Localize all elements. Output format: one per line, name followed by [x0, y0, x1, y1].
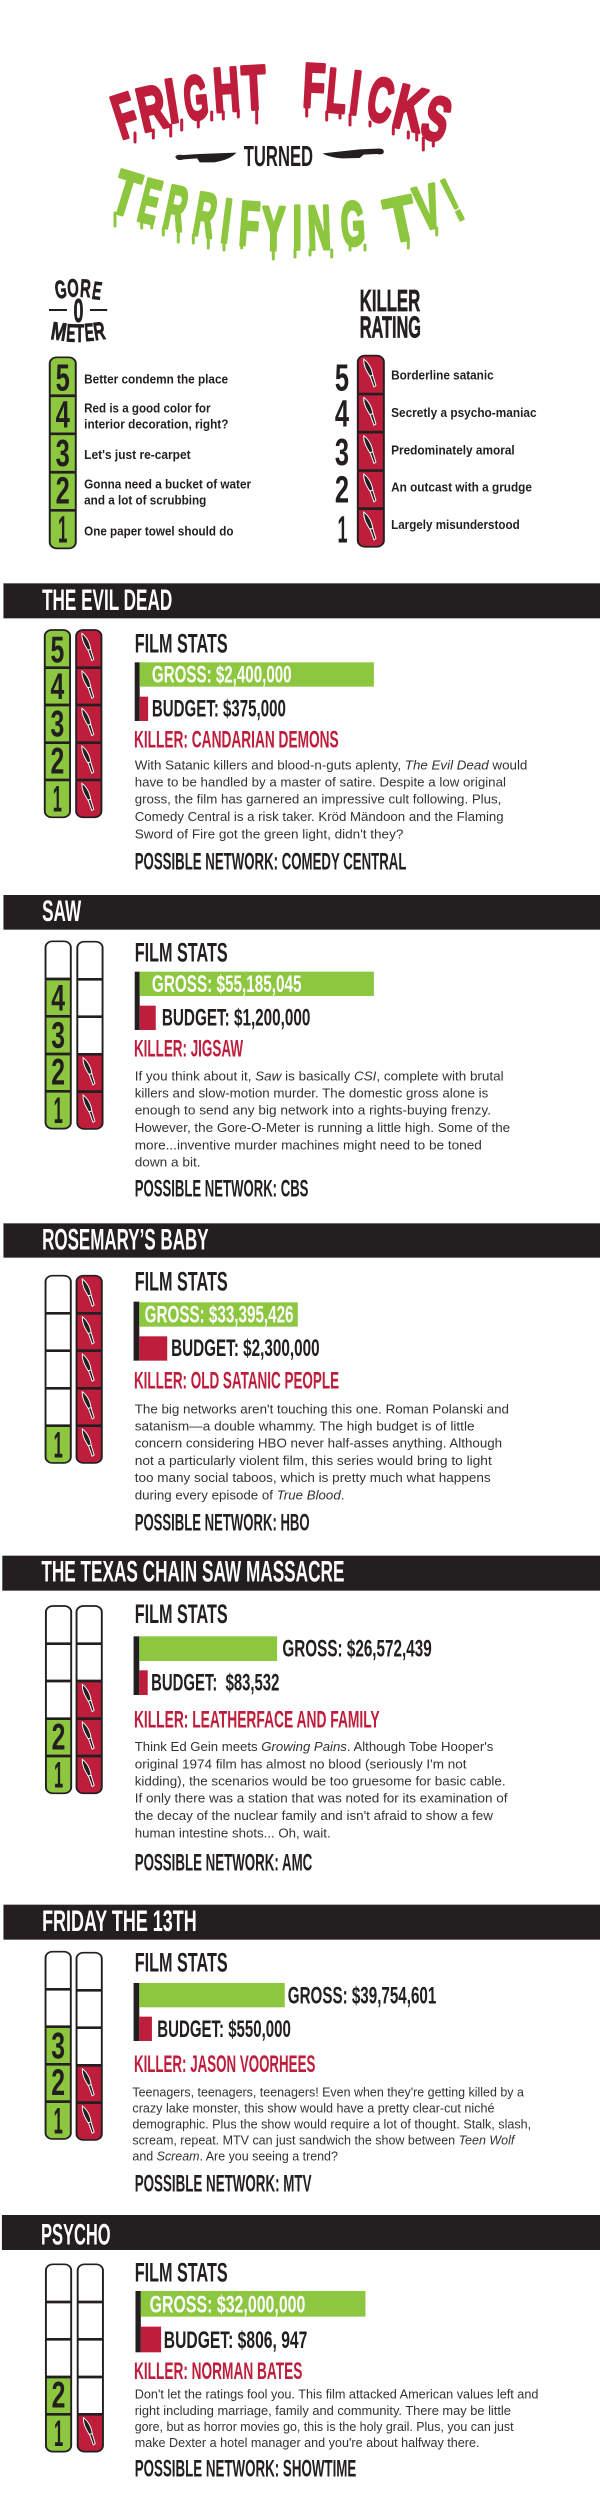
- description: If you think about it, Saw is basically CSI, complete with brutal: [135, 1068, 504, 1083]
- title line: Terrifying TV: I: [293, 194, 302, 263]
- killer rating legend numbers: 3: [335, 431, 349, 473]
- gore meter: 3: 2: [51, 2062, 65, 2103]
- section header: THE EVIL DEAD: [42, 583, 172, 616]
- killer rating legend numbers: 4: [335, 392, 349, 435]
- gore meter legend labels: interior decoration, right?: [84, 417, 228, 431]
- description: Sword of Fire got the green light, didn't they?: [135, 826, 404, 841]
- description: With Satanic killers and blood-n-guts aplenty, The Evil Dead would: [135, 757, 527, 772]
- gore meter legend labels: Better condemn the place: [84, 372, 228, 386]
- gore meter: 2: 2: [52, 2374, 65, 2416]
- description: human intestine shots... Oh, wait.: [135, 1825, 331, 1840]
- description: Don't let the ratings fool you. This film attacked American values left and: [135, 2387, 538, 2401]
- panel: Rosemary's Baby: [3, 1222, 600, 1536]
- heading: Gore-O-Meter: O: [66, 273, 80, 302]
- description: [135, 1739, 508, 1840]
- turned with knives: [175, 140, 384, 172]
- description: gore, but as horror movies go, this is the holy grail. Plus, you can just: [135, 2419, 514, 2434]
- title line: Terrifying TV: G: [339, 189, 367, 260]
- description: [135, 2387, 538, 2450]
- section header: PSYCHO: [41, 2218, 111, 2251]
- stats bars: BUDGET: $83,532: [151, 1670, 279, 1696]
- killer rating: 2: [77, 942, 103, 1129]
- heading: Gore-O-Meter: M: [49, 316, 69, 346]
- legends: KILLER: [360, 283, 420, 317]
- description: concern considering HBO never half-asses anything. Although: [135, 1436, 502, 1450]
- panel: Friday the 13th: [3, 1904, 600, 2197]
- knife right: [323, 149, 384, 158]
- gore meter legend labels: Let's just re-carpet: [84, 448, 191, 462]
- stats bars: BUDGET: $1,200,000: [162, 1005, 310, 1031]
- stats bars: [135, 972, 374, 1031]
- section header: [3, 583, 600, 618]
- title line: Fright Flicks: [104, 51, 459, 156]
- stats bars: GROSS: $26,572,439: [282, 1636, 432, 1662]
- gore meter legend labels: [84, 372, 252, 538]
- gore meter: 2: 2: [52, 1716, 65, 1758]
- panel: Psycho: [2, 2215, 600, 2482]
- section header: SAW: [42, 894, 81, 927]
- section header: FRIDAY THE 13TH: [42, 1904, 197, 1937]
- heading: Gore-O-Meter: R: [79, 274, 92, 303]
- description: down a bit.: [135, 1154, 201, 1169]
- gore meter legend bar: 4: [56, 394, 70, 436]
- film stats heading: FILM STATS: [135, 1267, 228, 1297]
- description: satanism—a double whammy. The high budget is of little: [135, 1418, 475, 1433]
- description: more...inventive murder machines might need to be toned: [135, 1137, 482, 1152]
- panel: The Texas Chain Saw Massacre: POSSIBLE NETWORK: AMC: [135, 1850, 312, 1876]
- description: and Scream. Are you seeing a trend?: [132, 2149, 338, 2163]
- gore meter: 5: 5: [51, 629, 64, 671]
- killer rating: 1: [78, 2264, 103, 2452]
- description: [135, 757, 527, 841]
- heading: Gore-O-Meter: E: [90, 276, 104, 305]
- gore meter: 4: 3: [51, 1015, 65, 1056]
- gore meter legend bar: 3: [56, 432, 70, 474]
- description: during every episode of True Blood.: [135, 1487, 344, 1502]
- panel: Psycho: KILLER: NORMAN BATES: [134, 2359, 302, 2385]
- description: enough to send any big network into a rights-buying frenzy.: [135, 1103, 491, 1117]
- description: Think Ed Gein meets Growing Pains. Although Tobe Hooper's: [135, 1739, 493, 1754]
- gore meter legend labels: Red is a good color for: [84, 401, 211, 415]
- legends: RATING: [360, 309, 421, 344]
- title line: Fright Flicks: T: [240, 53, 268, 124]
- title line: Terrifying TV: E: [132, 166, 168, 238]
- title line: Fright Flicks: F: [301, 51, 327, 122]
- panel: The Evil Dead: KILLER: CANDARIAN DEMONS: [134, 727, 339, 753]
- gore meter: 2: [46, 1606, 71, 1796]
- title line: Terrifying TV: R: [159, 173, 193, 245]
- gore meter: 5: 3: [51, 703, 64, 745]
- title line: Fright Flicks: S: [414, 83, 459, 156]
- killer rating legend labels: Predominately amoral: [391, 443, 515, 457]
- stats bars: BUDGET: $375,000: [152, 696, 286, 722]
- gore meter legend bar: 5: [56, 356, 70, 399]
- panel: Psycho: POSSIBLE NETWORK: SHOWTIME: [135, 2456, 356, 2482]
- title: [104, 51, 472, 264]
- title line: Terrifying TV: !: [433, 167, 472, 234]
- title line: Fright Flicks: K: [387, 72, 433, 146]
- gore meter: 4: 1: [54, 1090, 63, 1131]
- killer rating legend bar: [358, 356, 384, 547]
- gore meter: 5: 4: [51, 666, 65, 707]
- title line: Terrifying TV: R: [189, 180, 222, 252]
- panel: Saw: [3, 894, 600, 1202]
- title line: Terrifying TV: Y: [262, 195, 286, 264]
- killer rating: 5: [77, 1276, 102, 1463]
- description: Comedy Central is a risk taker. Kröd Mändoon and the Flaming: [135, 809, 504, 824]
- stats bars: GROSS: $32,000,000: [150, 2292, 305, 2318]
- description: gross, the film has garnered an impressive cult following. Plus,: [135, 792, 501, 806]
- gore meter: 3: 1: [54, 2100, 63, 2142]
- film stats heading: FILM STATS: [135, 629, 228, 659]
- stats bars: BUDGET: $2,300,000: [171, 1336, 320, 1362]
- panel: Friday the 13th: POSSIBLE NETWORK: MTV: [135, 2171, 312, 2197]
- stats bars: GROSS: $39,754,601: [288, 1983, 436, 2009]
- gore meter legend bar: 1: [58, 508, 67, 551]
- description: make Dexter a hotel manager and you're about halfway there.: [135, 2435, 480, 2450]
- gore meter: 2: 1: [54, 1754, 63, 1796]
- panel: The Evil Dead: [3, 583, 600, 875]
- panel: Rosemary's Baby: KILLER: OLD SATANIC PEOPLE: [134, 1368, 339, 1394]
- title line: Terrifying TV: [104, 158, 472, 264]
- stats bars: [135, 662, 374, 722]
- stats bars: [134, 1636, 432, 1696]
- description: kidding), the scenarios would be too gruesome for basic cable.: [135, 1774, 506, 1788]
- description: not a particularly violent film, this series would bring to light: [135, 1453, 492, 1468]
- description: demographic. Plus the show would require a lot of thought. Stalk, slash,: [132, 2117, 531, 2131]
- section header: [3, 1222, 600, 1258]
- stats bars: BUDGET: $550,000: [157, 2017, 291, 2043]
- heading: Gore-O-Meter: 0: [73, 292, 83, 329]
- killer rating legend numbers: [335, 356, 349, 551]
- heading: Gore-O-Meter: E: [65, 318, 76, 347]
- title line: Fright Flicks: F: [104, 80, 146, 153]
- gore meter: 5: 2: [51, 740, 64, 782]
- description: have to be handled by a master of satire. Despite a low original: [135, 775, 506, 789]
- description: original 1974 film has almost no blood (seriously I'm not: [135, 1756, 467, 1771]
- title line: Terrifying TV: T: [104, 158, 148, 231]
- legends: [49, 273, 537, 551]
- turned with knives: TURNED: [244, 140, 313, 172]
- description: If only there was a station that was noted for its examination of: [135, 1791, 508, 1805]
- gore meter: 3: [46, 1952, 71, 2142]
- gore meter: 5: 1: [53, 778, 62, 820]
- killer rating legend numbers: 2: [335, 468, 349, 511]
- heading: Gore-O-Meter: G: [53, 274, 69, 304]
- killer rating legend labels: An outcast with a grudge: [391, 480, 532, 494]
- killer rating legend labels: Secretly a psycho-maniac: [391, 406, 537, 420]
- panel: Saw: KILLER: JIGSAW: [134, 1036, 243, 1062]
- heading: Gore-O-Meter: R: [91, 316, 107, 346]
- gore meter: 4: 2: [51, 1051, 65, 1093]
- heading: Killer Rating: [360, 283, 421, 344]
- gore meter legend bar: 2: [56, 469, 70, 512]
- panel: Friday the 13th: KILLER: JASON VOORHEES: [134, 2052, 315, 2078]
- knife left: [175, 153, 237, 162]
- section header: [3, 1904, 600, 1940]
- panel: Saw: POSSIBLE NETWORK: CBS: [135, 1176, 308, 1202]
- killer rating legend numbers: 5: [335, 356, 349, 399]
- gore meter: 3: 3: [51, 2025, 65, 2067]
- title line: Terrifying TV: N: [307, 194, 332, 263]
- stats bars: GROSS: $55,185,045: [152, 972, 302, 998]
- gore meter: 1: 1: [54, 1424, 63, 1466]
- title line: Fright Flicks: C: [362, 65, 399, 137]
- film stats heading: FILM STATS: [135, 1948, 228, 1978]
- heading: Gore-O-Meter: T: [75, 319, 84, 348]
- film stats heading: FILM STATS: [135, 1600, 228, 1629]
- gore meter legend labels: One paper towel should do: [84, 524, 233, 538]
- stats bars: BUDGET: $806, 947: [164, 2328, 307, 2354]
- gore meter: 2: [46, 2264, 71, 2454]
- killer rating: 3: [77, 1606, 102, 1793]
- title line: Terrifying TV: T: [379, 183, 423, 257]
- killer rating legend labels: [391, 368, 537, 532]
- stats bars: [134, 1983, 436, 2043]
- section header: ROSEMARY’S BABY: [42, 1222, 209, 1256]
- title line: Fright Flicks: L: [324, 56, 350, 127]
- title line: Fright Flicks: I: [346, 59, 365, 129]
- section header: [3, 894, 600, 930]
- gore meter legend labels: Gonna need a bucket of water: [84, 477, 252, 491]
- description: right including marriage, family and community. There may be little: [135, 2403, 511, 2418]
- description: [132, 2084, 531, 2163]
- description: [135, 1068, 510, 1169]
- film stats heading: FILM STATS: [135, 938, 228, 968]
- description: crazy lake monster, this show would have a pretty clear-cut niché: [132, 2100, 495, 2115]
- title line: Fright Flicks: G: [180, 63, 211, 134]
- description: However, the Gore-O-Meter is running a little high. Some of the: [135, 1120, 510, 1135]
- gore meter legend bar: [50, 356, 76, 551]
- title line: Fright Flicks: H: [211, 55, 242, 126]
- legends: 1: [338, 508, 347, 551]
- stats bars: GROSS: $33,395,426: [145, 1302, 294, 1328]
- panel: Rosemary's Baby: POSSIBLE NETWORK: HBO: [135, 1510, 310, 1536]
- description: too many social taboos, which is pretty much what happens: [135, 1470, 491, 1485]
- gore meter: 4: 4: [51, 977, 65, 1019]
- heading: Gore-O-Meter: E: [83, 318, 95, 347]
- gore meter: 1: [46, 1276, 71, 1466]
- killer rating legend labels: Largely misunderstood: [391, 518, 520, 532]
- stats bars: [135, 2291, 365, 2354]
- gore meter: 5: [45, 629, 70, 820]
- title line: Fright Flicks: I: [161, 67, 183, 137]
- title line: Terrifying TV: I: [218, 187, 235, 256]
- heading: Gore-O-Meter: [49, 273, 107, 348]
- title line: Terrifying TV: V: [408, 172, 448, 244]
- description: [135, 1401, 509, 1502]
- killer rating: 2: [77, 1953, 102, 2140]
- description: Teenagers, teenagers, teenagers! Even when they're getting killed by a: [132, 2084, 524, 2099]
- killer rating: 5: [76, 630, 101, 817]
- killer rating legend labels: Borderline satanic: [391, 368, 494, 382]
- description: scream, repeat. MTV can just sandwich the show between Teen Wolf: [132, 2133, 516, 2147]
- description: killers and slow-motion murder. The domestic gross alone is: [135, 1086, 488, 1100]
- title line: Fright Flicks: R: [131, 72, 173, 146]
- stats bars: [134, 1302, 320, 1362]
- panel: The Texas Chain Saw Massacre: [2, 1555, 600, 1876]
- stats bars: GROSS: $2,400,000: [152, 662, 292, 688]
- gore meter legend labels: and a lot of scrubbing: [84, 493, 206, 507]
- description: The big networks aren't touching this one. Roman Polanski and: [135, 1401, 509, 1416]
- title line: Terrifying TV: F: [237, 189, 262, 260]
- gore meter: 2: 1: [54, 2413, 63, 2454]
- section header: [2, 2215, 600, 2251]
- film stats heading: FILM STATS: [135, 2258, 228, 2288]
- description: the decay of the nuclear family and isn't afraid to show a few: [135, 1808, 494, 1823]
- gore meter: 4: [46, 941, 71, 1131]
